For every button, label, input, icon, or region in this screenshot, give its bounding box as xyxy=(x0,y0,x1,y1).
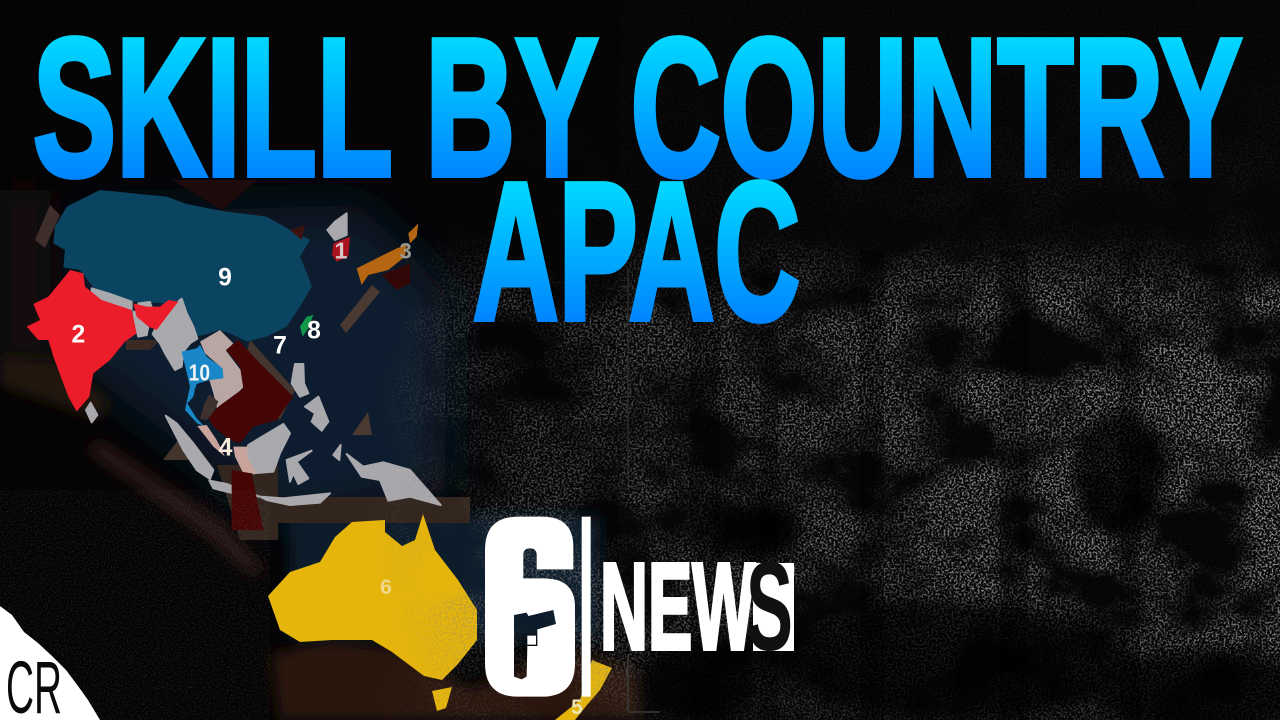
rank number: 1: 1 xyxy=(335,237,348,263)
country: Australia, rank 6 xyxy=(268,514,477,711)
rank number: 5: 5 xyxy=(571,696,583,719)
country: Thailand, rank 10 xyxy=(182,345,223,426)
country: North Philippines, rank 8 xyxy=(300,315,313,337)
rank number: 9: 9 xyxy=(218,264,232,291)
logo: NEWS wordmark: NEW xyxy=(600,539,755,676)
logo: NEWS wordmark xyxy=(600,536,794,677)
background: dark sea of the map xyxy=(0,190,600,640)
rank number: 6: 6 xyxy=(380,576,392,599)
rank number: 7: 7 xyxy=(273,332,287,359)
logo: number six with pistol cutout xyxy=(485,517,575,697)
background: brown map strips xyxy=(0,180,640,720)
rank number: 8: 8 xyxy=(307,318,321,345)
logo: vertical divider xyxy=(582,517,591,697)
country: India, rank 2 xyxy=(27,270,178,412)
map: Asia-Pacific countries xyxy=(27,190,441,530)
logo: NEWS wordmark: S xyxy=(746,536,793,677)
country: Japan, rank 3 xyxy=(357,223,418,285)
rank number: 10: 10 xyxy=(189,360,210,386)
country: South Korea, rank 1 xyxy=(332,237,350,262)
country: Vietnam region, dark red xyxy=(208,340,293,530)
country: China, rank 9 xyxy=(53,190,312,342)
country: Malaysia and Singapore, rank 4 xyxy=(197,425,257,473)
corner badge: CR logo xyxy=(0,606,100,720)
rank number: 2: 2 xyxy=(71,321,85,348)
logo: Rainbow Six News xyxy=(485,517,591,697)
title: APAC: APAC xyxy=(473,142,800,361)
countries: Laos, Cambodia and Vietnam tint xyxy=(200,330,244,410)
countries: neighbouring grey countries xyxy=(86,213,441,505)
rank number: 3: 3 xyxy=(400,239,412,264)
country: New Zealand, rank 5 xyxy=(555,660,612,720)
rank number: 4: 4 xyxy=(219,434,233,461)
country: Japan region shadow xyxy=(382,263,410,290)
